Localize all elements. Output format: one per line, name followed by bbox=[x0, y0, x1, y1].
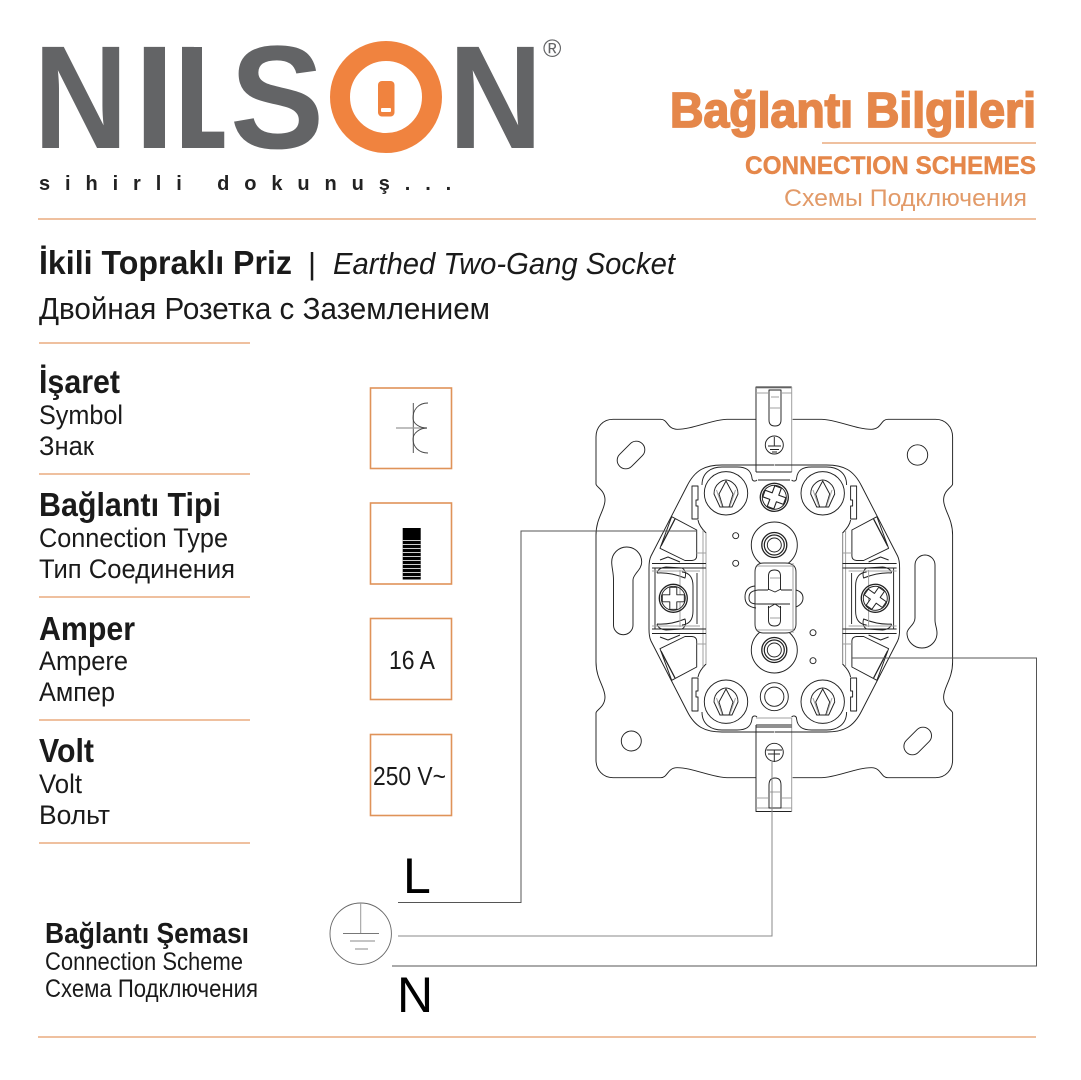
connection scheme label: Connection Scheme bbox=[45, 948, 243, 976]
spec label: volt bbox=[39, 732, 110, 830]
label N: N bbox=[397, 967, 433, 1023]
product title bbox=[39, 244, 676, 326]
label L: L bbox=[403, 848, 431, 904]
tab: top bbox=[756, 387, 792, 480]
heading: connection info: Схемы Подключения bbox=[784, 185, 1027, 212]
connection scheme label: Схема Подключения bbox=[45, 975, 258, 1003]
tab: bottom bbox=[756, 718, 792, 812]
spec label: symbol bbox=[39, 363, 123, 461]
product title: Earthed Two-Gang Socket bbox=[333, 246, 676, 281]
logo: Nilson: S bbox=[230, 15, 324, 180]
socket diagram bbox=[596, 387, 953, 812]
screws bbox=[659, 479, 895, 711]
logo: Nilson: N bbox=[448, 16, 542, 180]
spec label: symbol: İşaret bbox=[39, 363, 120, 400]
heading: connection info bbox=[670, 84, 1036, 212]
product title: Двойная Розетка с Заземлением bbox=[39, 291, 490, 326]
socket quadrant: top right bbox=[775, 419, 953, 598]
socket quadrant: top left bbox=[596, 419, 774, 598]
logo: Nilson: I bbox=[134, 16, 175, 180]
spec label: connection type: Тип Соединения bbox=[39, 554, 235, 584]
small rivets bbox=[733, 533, 816, 664]
socket quadrant: bottom right bbox=[775, 598, 953, 778]
logo: Nilson bbox=[34, 15, 562, 180]
spec label: ampere: Ampere bbox=[39, 646, 128, 676]
spec box: 16 A bbox=[370, 618, 452, 700]
connection scheme label: Bağlantı Şeması bbox=[45, 918, 249, 950]
spec label: symbol: Знак bbox=[39, 431, 94, 461]
mounting holes and slots bbox=[612, 438, 937, 758]
tagline: sihirli dokunuş... bbox=[39, 173, 466, 195]
spec label: ampere: Amper bbox=[39, 610, 135, 647]
spec box: 16 A: 16 A bbox=[389, 645, 436, 675]
spec label: volt: Вольт bbox=[39, 800, 110, 830]
spec label: ampere: Ампер bbox=[39, 677, 115, 707]
logo: Nilson: N bbox=[34, 16, 128, 180]
socket holes bbox=[704, 472, 844, 723]
spec label: volt: Volt bbox=[39, 732, 94, 769]
spec box: 250 V bbox=[370, 734, 452, 816]
icon: earth symbol bbox=[330, 903, 391, 964]
spec label: connection type: Bağlantı Tipi bbox=[39, 486, 221, 523]
heading: connection info: CONNECTION SCHEMES bbox=[745, 152, 1036, 180]
connection scheme label bbox=[45, 918, 258, 1003]
icon: orange O with switch bbox=[340, 51, 432, 143]
spec label: volt: Volt bbox=[39, 769, 82, 799]
spec box: connection type icon bbox=[370, 503, 452, 584]
product title: | bbox=[308, 246, 316, 281]
spec label: connection type: Connection Type bbox=[39, 523, 228, 553]
product title: İkili Topraklı Priz bbox=[39, 244, 292, 281]
spec box: 250 V: 250 V~ bbox=[373, 761, 446, 791]
wire: L bbox=[398, 531, 697, 902]
spec box: symbol icon bbox=[370, 388, 452, 468]
spec label: symbol: Symbol bbox=[39, 400, 123, 430]
wire: N bbox=[392, 658, 1036, 966]
spec label: ampere bbox=[39, 610, 135, 707]
logo: Nilson: ® bbox=[543, 35, 562, 63]
heading: connection info: Bağlantı Bilgileri bbox=[670, 84, 1036, 138]
logo: Nilson: L bbox=[176, 16, 227, 180]
socket quadrant: bottom left bbox=[596, 598, 774, 778]
wire: earth bbox=[398, 762, 772, 936]
centre pins and clip bbox=[745, 522, 803, 673]
spec label: connection type bbox=[39, 486, 235, 584]
